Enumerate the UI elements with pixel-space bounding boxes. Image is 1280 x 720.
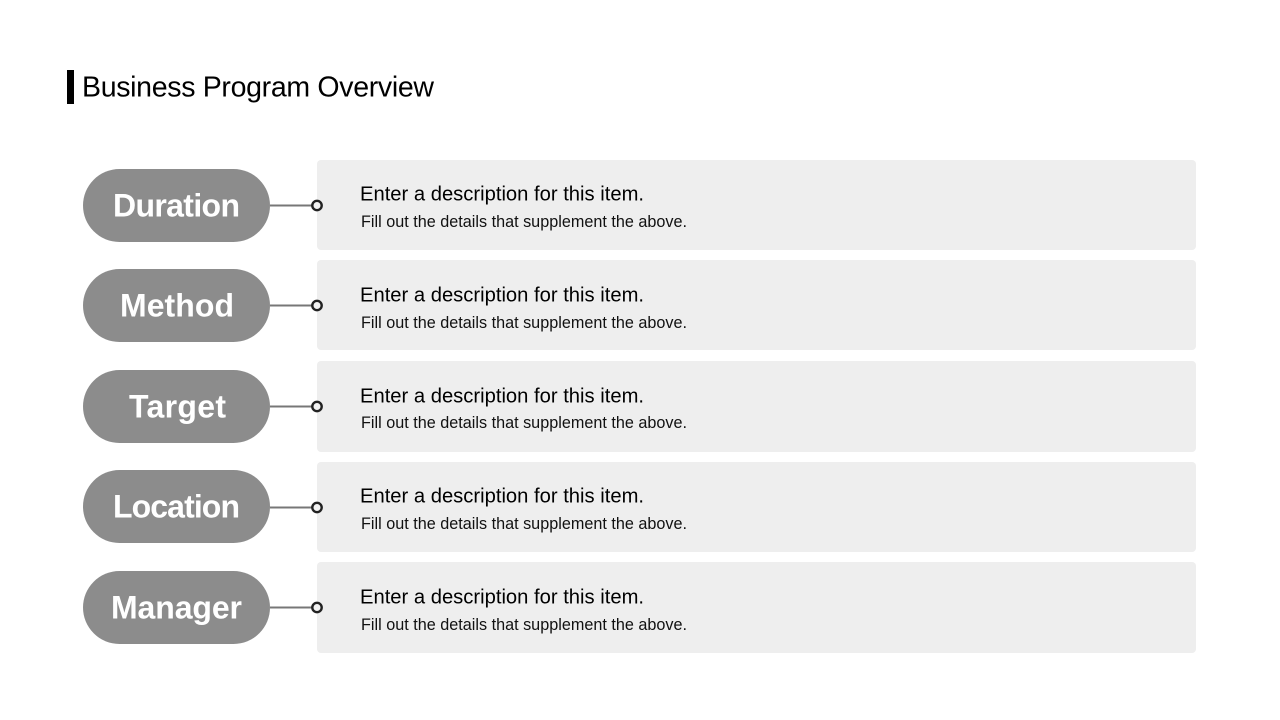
description detail: Fill out the details that supplement the above. — [361, 314, 687, 332]
description heading: Enter a description for this item. — [360, 486, 644, 508]
pill label: Location — [113, 488, 240, 524]
connector line — [270, 606, 317, 608]
label pill — [83, 269, 270, 342]
row: Target — [83, 361, 1196, 452]
title — [67, 70, 434, 104]
connector line — [270, 406, 317, 408]
description card — [317, 260, 1196, 350]
pill label: Duration — [113, 188, 240, 224]
label pill — [83, 169, 270, 242]
description card — [317, 562, 1196, 653]
description heading: Enter a description for this item. — [360, 386, 644, 408]
label pill — [83, 370, 270, 443]
connector dot — [312, 301, 322, 310]
pill label: Method — [120, 288, 234, 324]
title accent bar — [67, 70, 74, 104]
row: Location — [83, 462, 1196, 552]
connector dot — [312, 201, 322, 210]
connector line — [270, 204, 317, 206]
description card — [317, 160, 1196, 250]
connector dot — [312, 402, 322, 411]
description heading: Enter a description for this item. — [360, 586, 644, 608]
row: Method — [83, 260, 1196, 350]
connector dot — [312, 603, 322, 612]
row: Duration — [83, 160, 1196, 250]
label pill — [83, 571, 270, 644]
description detail: Fill out the details that supplement the above. — [361, 616, 687, 634]
label pill — [83, 470, 270, 543]
connector dot — [312, 503, 322, 512]
description detail: Fill out the details that supplement the above. — [361, 414, 687, 432]
connector line — [270, 506, 317, 508]
description detail: Fill out the details that supplement the above. — [361, 515, 687, 533]
pill label: Manager — [111, 590, 242, 626]
description heading: Enter a description for this item. — [360, 284, 644, 306]
connector line — [270, 304, 317, 306]
description card — [317, 361, 1196, 452]
description heading: Enter a description for this item. — [360, 184, 644, 206]
row: Manager — [83, 562, 1196, 653]
description card — [317, 462, 1196, 552]
title text: Business Program Overview — [82, 72, 434, 104]
pill label: Target — [129, 388, 226, 424]
description detail: Fill out the details that supplement the above. — [361, 213, 687, 231]
